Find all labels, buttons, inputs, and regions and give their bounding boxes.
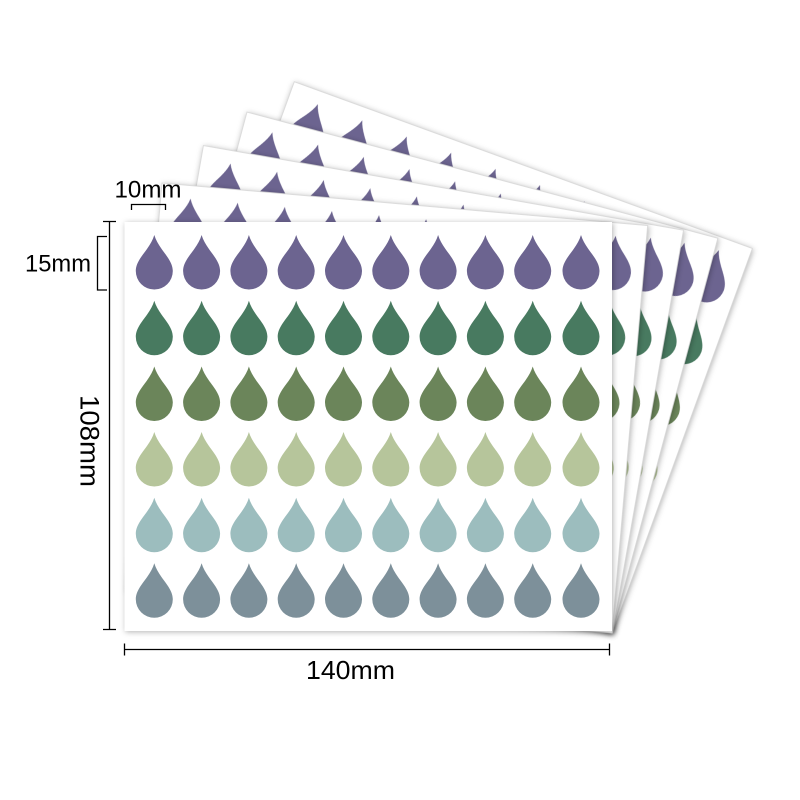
sticker sheet 4 (rotated 15 degrees) bbox=[141, 112, 718, 633]
sticker sheet 1 (front) with six rows of ten droplets bbox=[124, 222, 612, 631]
sticker sheet 3 (rotated 10 degrees) bbox=[132, 146, 684, 633]
dimension: sheet height 108mm bbox=[74, 222, 116, 630]
sticker sheet 2 (rotated 5 degrees) bbox=[126, 183, 648, 633]
dimension: droplet width 10mm: 10mm bbox=[114, 176, 182, 204]
dimension: sheet height 108mm: 108mm bbox=[74, 395, 104, 487]
dimension: sheet width 140mm: 140mm bbox=[306, 655, 395, 685]
dimension: droplet height 15mm bbox=[25, 236, 107, 290]
dimension: sheet width 140mm bbox=[124, 644, 610, 685]
sticker sheet 5 (rearmost, rotated 20 degrees) bbox=[154, 82, 752, 633]
dimension: droplet height 15mm: 15mm bbox=[25, 250, 91, 278]
